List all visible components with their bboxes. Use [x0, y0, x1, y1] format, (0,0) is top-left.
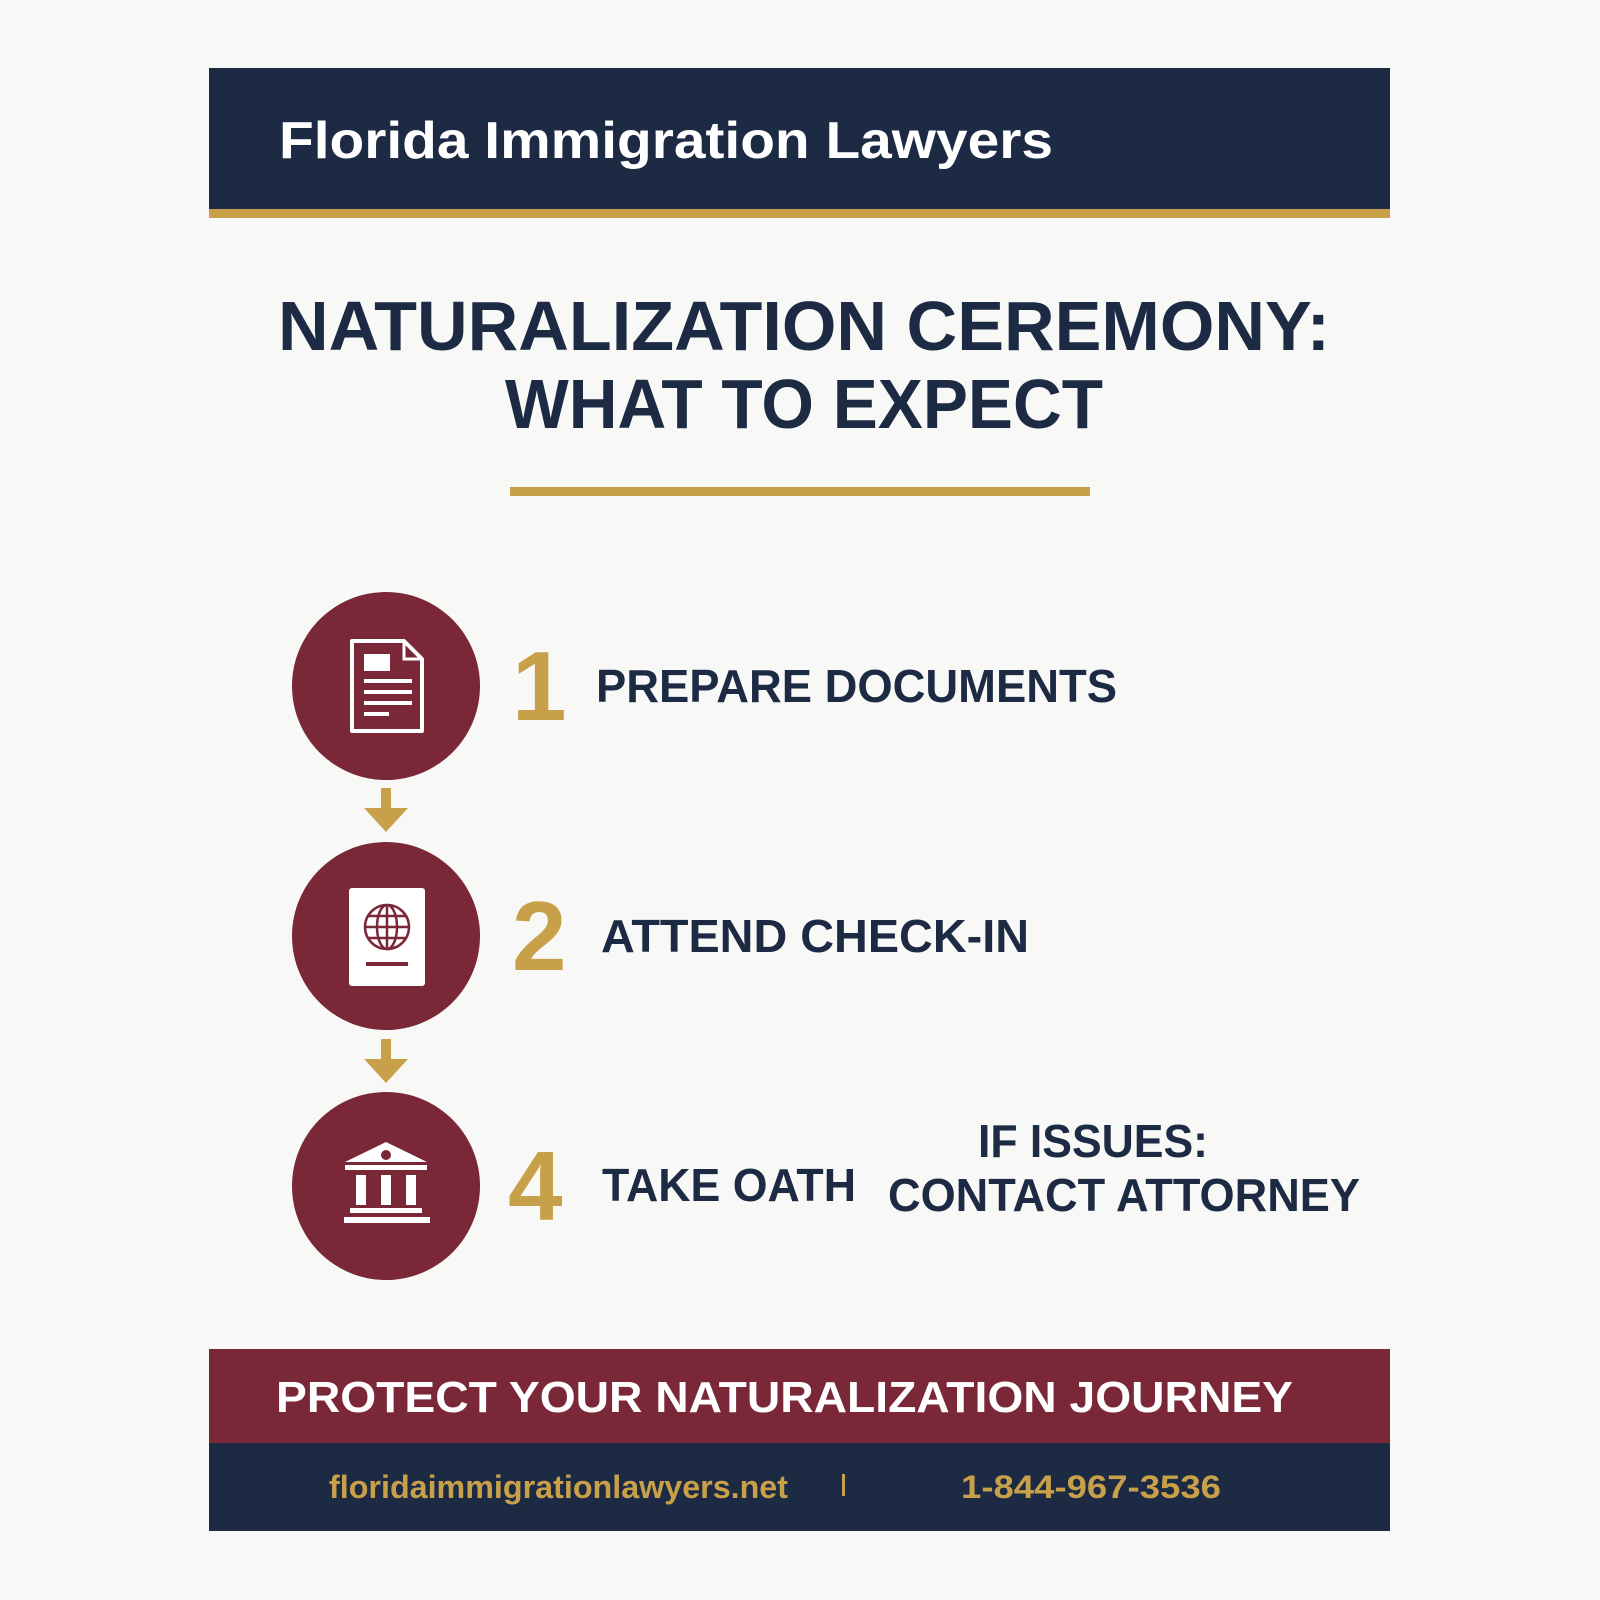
step 4 [292, 1092, 856, 1280]
callout: if issues: CONTACT ATTORNEY [888, 1169, 1360, 1221]
number 4: 4 [508, 1131, 563, 1241]
title: WHAT TO EXPECT [505, 365, 1103, 443]
step 1 label: PREPARE DOCUMENTS [596, 660, 1117, 712]
header bar [209, 68, 1390, 218]
title: NATURALIZATION CEREMONY: [278, 287, 1330, 365]
title [278, 287, 1330, 443]
icon: document [292, 592, 480, 780]
footer contact: floridaimmigrationlawyers.net [329, 1469, 788, 1505]
icon: courthouse [292, 1092, 480, 1280]
footer banner [209, 1349, 1390, 1443]
number 1: 1 [512, 631, 567, 741]
step 4 label: TAKE OATH [602, 1159, 856, 1211]
arrow 1 [364, 788, 408, 832]
footer banner: PROTECT YOUR NATURALIZATION JOURNEY [276, 1373, 1293, 1422]
callout: if issues: IF ISSUES: [978, 1115, 1208, 1167]
header text: Florida Immigration Lawyers [279, 112, 1053, 170]
number 2: 2 [512, 881, 567, 991]
footer contact [209, 1443, 1390, 1531]
arrow 2 [364, 1039, 408, 1083]
footer contact: 1-844-967-3536 [961, 1469, 1221, 1505]
title underline [510, 487, 1090, 496]
callout: if issues [888, 1115, 1360, 1221]
step 1 [292, 592, 1117, 780]
step 2 [292, 842, 1029, 1030]
icon: passport [292, 842, 480, 1030]
step 2 label: ATTEND CHECK-IN [601, 910, 1029, 962]
